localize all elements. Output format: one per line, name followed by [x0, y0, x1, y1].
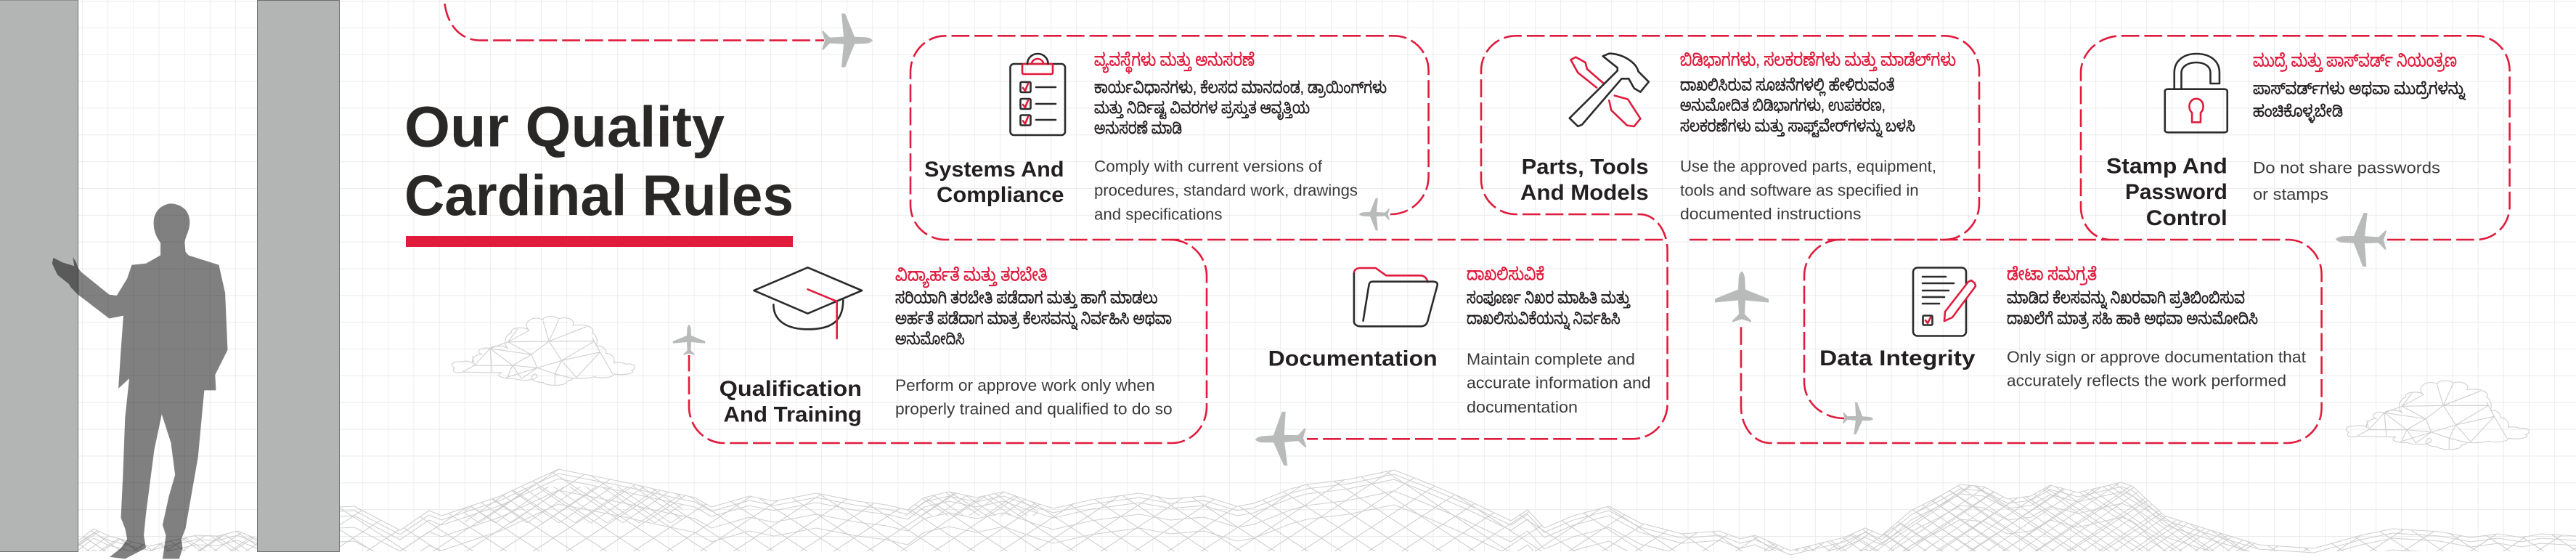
plane: qualification panel [673, 325, 705, 355]
English body: Maintain complete and [1467, 350, 1635, 368]
Kannada heading: ಬಿಡಿಭಾಗಗಳು, ಸಲಕರಣೆಗಳು ಮತ್ತು ಮಾಡೆಲ್‌ಗಳು [1680, 51, 1956, 72]
Kannada body: ಸಲಕರಣೆಗಳು ಮತ್ತು ಸಾಫ್ಟ್‌ವೇರ್‌ಗಳನ್ನು ಬಳಸಿ [1680, 117, 1915, 138]
plane: documentation panel [1255, 411, 1307, 466]
Kannada body: ದಾಖಲಿಸಿರುವ ಸೂಚನೆಗಳಲ್ಲಿ ಹೇಳಿರುವಂತೆ [1680, 76, 1894, 96]
icon: graduation cap [754, 267, 862, 338]
title: Cardinal Rules [404, 163, 794, 227]
Kannada heading: ವ್ಯವಸ್ಥೆಗಳು ಮತ್ತು ಅನುಸರಣೆ [1094, 51, 1255, 74]
English body: Comply with current versions of [1094, 158, 1323, 176]
heading: Control [2146, 206, 2227, 230]
English body: Only sign or approve documentation that [2007, 348, 2306, 366]
Kannada body: ಸಂಪೂರ್ಣ ನಿಖರ ಮಾಹಿತಿ ಮತ್ತು [1467, 289, 1631, 309]
Kannada body: ಕಾರ್ಯವಿಧಾನಗಳು, ಕೆಲಸದ ಮಾನದಂಡ, ಡ್ರಾಯಿಂಗ್‌ಗಳು [1094, 78, 1387, 98]
dashed route around qualification panel [689, 240, 1207, 443]
panel: parts, tools and models [1307, 36, 1979, 439]
icon: document and pen [1913, 267, 1976, 336]
Kannada body [1680, 76, 1915, 138]
dashed route around stamp panel [2081, 36, 2510, 240]
heading: Password [2125, 180, 2227, 204]
icon: folder [1354, 268, 1438, 326]
heading: Systems And [924, 158, 1064, 182]
wireframe mountains [73, 465, 2576, 560]
English body [1467, 350, 1651, 416]
English body [2007, 348, 2306, 390]
English body: documentation [1467, 398, 1578, 416]
English body: Use the approved parts, equipment, [1680, 158, 1936, 176]
panel: systems and compliance [910, 36, 1663, 240]
dashed route around systems panel [910, 36, 1663, 240]
English body: documented instructions [1680, 205, 1862, 223]
heading: Stamp And [2106, 154, 2227, 178]
Kannada heading: ಡೇಟಾ ಸಮಗ್ರತೆ [2007, 265, 2097, 286]
heading: Data Integrity [1819, 346, 1976, 370]
heading: Qualification [720, 377, 862, 401]
English body: accurate information and [1467, 374, 1651, 392]
Kannada body: ಅನುಮೋದಿಸಿ [895, 330, 965, 348]
Kannada heading: ವಿದ್ಯಾರ್ಹತೆ ಮತ್ತು ತರಬೇತಿ [895, 266, 1047, 288]
Kannada body: ಮಾಡಿದ ಕೆಲಸವನ್ನು ನಿಖರವಾಗಿ ಪ್ರತಿಬಿಂಬಿಸುವ [2007, 289, 2245, 310]
left cloud [452, 317, 635, 385]
panel: documentation [1255, 240, 1668, 466]
Kannada body [2007, 289, 2258, 329]
plane: systems panel [1359, 198, 1390, 230]
English body: or stamps [2253, 185, 2328, 203]
Kannada body: ಪಾಸ್‌ವರ್ಡ್‌ಗಳು ಅಥವಾ ಮುದ್ರೆಗಳನ್ನು [2253, 79, 2466, 100]
heading [924, 158, 1064, 207]
plane: data panel [1842, 402, 1874, 435]
plane at end of entry line [822, 14, 873, 68]
Kannada body [1467, 289, 1631, 330]
grey column left [0, 0, 78, 552]
Kannada body: ಸರಿಯಾಗಿ ತರಬೇತಿ ಪಡೆದಾಗ ಮತ್ತು ಹಾಗೆ ಮಾಡಲು [895, 289, 1158, 309]
English body: and specifications [1094, 206, 1223, 224]
panel: data integrity [1715, 240, 2322, 443]
Kannada body: ಅನುಮೋದಿತ ಬಿಡಿಭಾಗಗಳು, ಉಪಕರಣ, [1680, 96, 1886, 114]
Kannada body [1094, 78, 1387, 137]
dashed route: entry line [444, 4, 824, 41]
silhouette of standing man [52, 203, 228, 559]
Kannada body [895, 289, 1172, 348]
heading: Parts, Tools [1522, 155, 1649, 179]
heading: Documentation [1268, 346, 1438, 370]
Kannada body: ಮತ್ತು ನಿರ್ದಿಷ್ಟ ವಿವರಗಳ ಪ್ರಸ್ತುತ ಆವೃತ್ತಿಯ [1094, 99, 1310, 121]
Kannada body: ದಾಖಲೆಗೆ ಮಾತ್ರ ಸಹಿ ಹಾಕಿ ಅಥವಾ ಅನುಮೋದಿಸಿ [2007, 309, 2258, 329]
title: Our Quality [404, 94, 725, 158]
Kannada body: ಅರ್ಹತೆ ಪಡೆದಾಗ ಮಾತ್ರ ಕೆಲಸವನ್ನು ನಿರ್ವಹಿಸಿ ಅಥವಾ [895, 309, 1172, 330]
heading [2106, 154, 2227, 230]
heading [720, 377, 862, 427]
heading [1520, 155, 1649, 205]
Kannada body: ಹಂಚಿಕೊಳ್ಳಬೇಡಿ [2253, 102, 2343, 123]
icon: padlock [2165, 54, 2227, 132]
English body: properly trained and qualified to do so [895, 400, 1173, 418]
heading: And Models [1520, 181, 1649, 205]
English body [1680, 158, 1936, 223]
panel: stamp and password control [2081, 36, 2510, 267]
English body [2253, 159, 2440, 203]
icon: clipboard [1011, 54, 1065, 135]
grey column right [257, 0, 340, 552]
heading: And Training [723, 403, 862, 427]
English body [1094, 158, 1358, 224]
English body: Perform or approve work only when [895, 376, 1155, 394]
English body: tools and software as specified in [1680, 181, 1919, 199]
English body: accurately reflects the work performed [2007, 372, 2286, 390]
Kannada body: ಅನುಸರಣೆ ಮಾಡಿ [1094, 119, 1182, 137]
Kannada body [2253, 79, 2466, 123]
dashed route around parts panel [1307, 36, 1979, 439]
Kannada body: ದಾಖಲಿಸುವಿಕೆಯನ್ನು ನಿರ್ವಹಿಸಿ [1467, 309, 1621, 330]
English body [895, 376, 1173, 418]
icon: hammer and screwdriver [1570, 54, 1649, 126]
panel: qualification and training [673, 240, 1207, 443]
English body: procedures, standard work, drawings [1094, 181, 1358, 199]
title underline [406, 236, 793, 247]
title [404, 94, 794, 227]
heading: Compliance [937, 183, 1064, 207]
English body: Do not share passwords [2253, 159, 2440, 177]
plane: stamp panel [2335, 212, 2387, 267]
right cloud [2346, 381, 2529, 450]
Kannada heading: ದಾಖಲಿಸುವಿಕೆ [1467, 265, 1544, 285]
dashed route around data panel [1741, 240, 2322, 443]
Kannada heading: ಮುದ್ರೆ ಮತ್ತು ಪಾಸ್‌ವರ್ಡ್ ನಿಯಂತ್ರಣ [2253, 52, 2457, 73]
plane: upward on data panel [1715, 272, 1769, 322]
